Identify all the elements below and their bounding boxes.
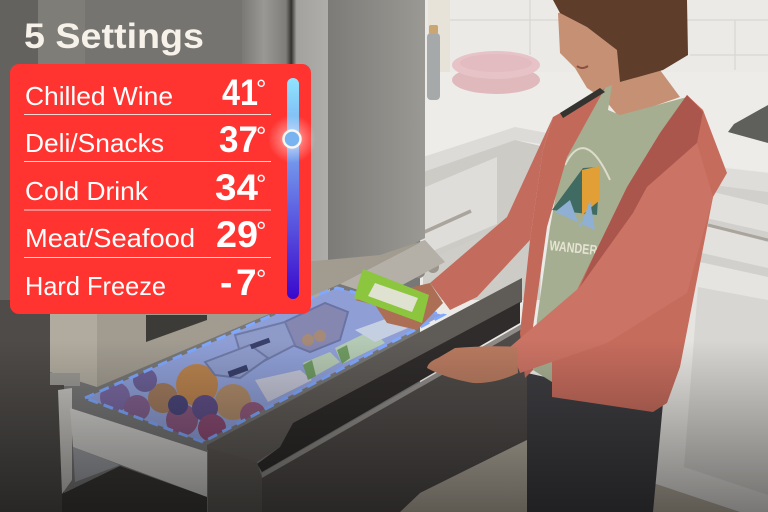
food containers	[205, 303, 348, 378]
right cabinets	[653, 167, 768, 512]
row: deli snacks: °	[256, 121, 266, 151]
row: deli snacks	[25, 119, 266, 160]
t-shirt: WANDER	[549, 237, 598, 258]
drawer interior with food	[85, 288, 443, 442]
neck and face	[558, 10, 680, 118]
upper freezer drawer	[50, 240, 445, 387]
juice cartons	[255, 320, 408, 402]
row: hard freeze	[25, 262, 266, 303]
temperature slider	[268, 78, 316, 299]
row: hard freeze: -	[220, 262, 232, 303]
hand on drawer	[427, 346, 518, 383]
drawer hinge	[50, 373, 80, 386]
refrigerator doors	[0, 0, 425, 512]
vase	[427, 25, 440, 100]
row: chilled wine: °	[256, 74, 266, 104]
hair	[553, 0, 688, 82]
row: cold drink	[25, 167, 266, 208]
title: 5 Settings	[24, 17, 204, 56]
row: chilled wine: Chilled Wine	[25, 81, 173, 111]
cabinet handles and knobs	[413, 211, 768, 278]
row: cold drink: Cold Drink	[25, 176, 149, 206]
row: hard freeze: 7	[236, 262, 257, 303]
hoodie left panel	[520, 88, 605, 378]
row: meat seafood: °	[256, 216, 266, 246]
row: deli snacks: 37	[219, 119, 258, 160]
row: meat seafood: 29	[216, 214, 258, 255]
tray on counter	[728, 105, 768, 143]
row: cold drink: °	[256, 169, 266, 199]
panel: temperature settings	[10, 64, 316, 314]
hoodie body	[552, 95, 727, 412]
row: chilled wine	[25, 72, 266, 113]
row: meat seafood: Meat/Seafood	[25, 223, 195, 253]
floor	[400, 400, 560, 512]
fruit	[100, 364, 266, 442]
dashed cooling outline	[85, 288, 443, 442]
hand holding carton	[355, 283, 443, 330]
t-shirt	[533, 85, 687, 382]
hoodie sleeves	[510, 143, 713, 373]
hood interior	[580, 95, 703, 287]
row: cold drink: 34	[215, 167, 258, 208]
smile	[577, 66, 588, 68]
drawer front	[207, 278, 527, 512]
row: hard freeze: Hard Freeze	[25, 271, 166, 301]
lower drawer side rail	[50, 385, 207, 512]
kitchen background	[400, 0, 768, 512]
person	[354, 0, 727, 512]
plates	[452, 51, 540, 94]
pants	[527, 373, 663, 512]
row: deli snacks: Deli/Snacks	[25, 128, 164, 158]
row: meat seafood	[25, 214, 266, 255]
bottom shading	[0, 340, 768, 512]
row: hard freeze: °	[256, 264, 266, 294]
hoodie collar strip	[560, 88, 605, 118]
juice carton	[354, 269, 429, 323]
row: chilled wine: 41	[222, 72, 258, 113]
